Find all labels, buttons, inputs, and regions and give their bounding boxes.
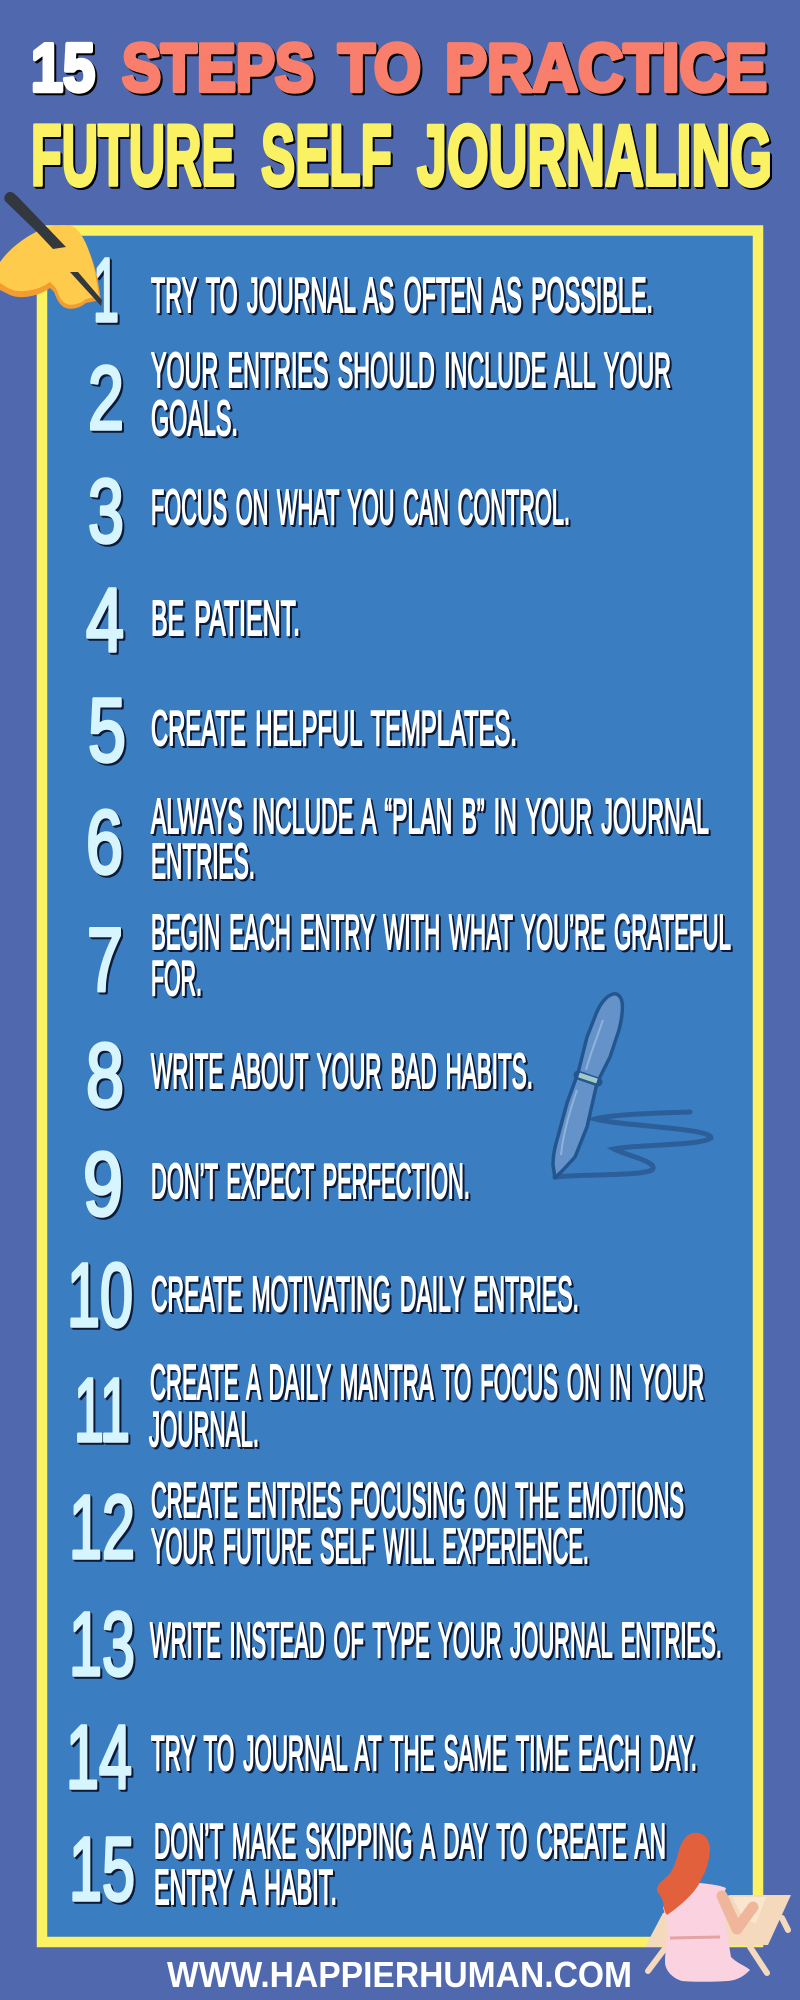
pen ring <box>578 1075 598 1082</box>
dress <box>663 1883 750 1982</box>
step 1 <box>93 241 653 341</box>
belt <box>670 1937 720 1938</box>
title line 2: FUTURE <box>31 108 235 204</box>
step 2 <box>88 343 671 449</box>
number 11: 11 <box>74 1361 130 1461</box>
step 9 <box>83 1135 470 1235</box>
title line 1: 15 <box>31 30 95 106</box>
step 12 text <box>151 1473 684 1574</box>
step 13 <box>69 1595 722 1695</box>
title line 2 <box>31 108 772 204</box>
title line 2: SELF <box>261 108 392 204</box>
step 15 text: ENTRY A HABIT. <box>154 1860 337 1915</box>
step 14 <box>66 1708 697 1808</box>
pen body <box>553 994 622 1178</box>
pen lower part <box>70 272 102 306</box>
title line 1: TO <box>338 30 421 106</box>
pen highlight <box>561 1020 603 1155</box>
hand <box>0 225 99 305</box>
number 10: 10 <box>67 1246 133 1346</box>
arm <box>722 1896 753 1929</box>
title line 1: PRACTICE <box>445 30 767 106</box>
number 8: 8 <box>86 1026 124 1126</box>
number 14: 14 <box>66 1708 132 1808</box>
step 11 text <box>149 1355 704 1457</box>
title <box>31 30 772 204</box>
number 3: 3 <box>88 462 124 562</box>
step 12 <box>69 1473 684 1578</box>
icon: woman writing at table <box>645 1833 791 1982</box>
step 7 text: FOR. <box>151 951 202 1006</box>
title line 1 <box>31 30 767 106</box>
notebook <box>732 1897 766 1923</box>
step 5 <box>88 681 517 781</box>
step 15 <box>69 1814 666 1920</box>
step 2 text: GOALS. <box>151 391 238 446</box>
number 1: 1 <box>93 241 119 341</box>
panel: steps list <box>42 230 758 1942</box>
title line 1: STEPS <box>122 30 314 106</box>
icon: blue pen with scribble <box>553 994 711 1178</box>
step 10 <box>67 1246 579 1346</box>
number 9: 9 <box>83 1135 123 1235</box>
step 4 text: BE PATIENT. <box>151 591 300 646</box>
step 11 text: JOURNAL. <box>149 1402 259 1457</box>
icon: hand holding pen <box>0 192 102 309</box>
number 5: 5 <box>88 681 126 781</box>
table <box>645 1895 791 1973</box>
step 6 text: ENTRIES. <box>151 834 255 889</box>
number 13: 13 <box>69 1595 135 1695</box>
pen upper part <box>4 192 66 249</box>
step 15 text <box>154 1814 666 1915</box>
number 7: 7 <box>87 911 123 1011</box>
step 11 <box>74 1355 704 1461</box>
step 3 <box>88 462 570 562</box>
number 12: 12 <box>69 1478 135 1578</box>
step 4 <box>86 571 300 671</box>
number 6: 6 <box>86 793 123 893</box>
number 4: 4 <box>86 571 124 671</box>
hair <box>657 1833 710 1915</box>
step 2 text <box>151 343 671 446</box>
number 15: 15 <box>69 1820 135 1920</box>
number 2: 2 <box>88 349 124 449</box>
hand shadow <box>0 227 101 309</box>
step 8 <box>86 1026 533 1126</box>
scribble line <box>555 1112 711 1177</box>
website url: WWW.HAPPIERHUMAN.COM <box>167 1954 632 1995</box>
step 7 <box>87 905 731 1011</box>
step 6 text <box>151 789 709 889</box>
step 6 <box>86 789 709 893</box>
step 7 text <box>151 905 731 1006</box>
